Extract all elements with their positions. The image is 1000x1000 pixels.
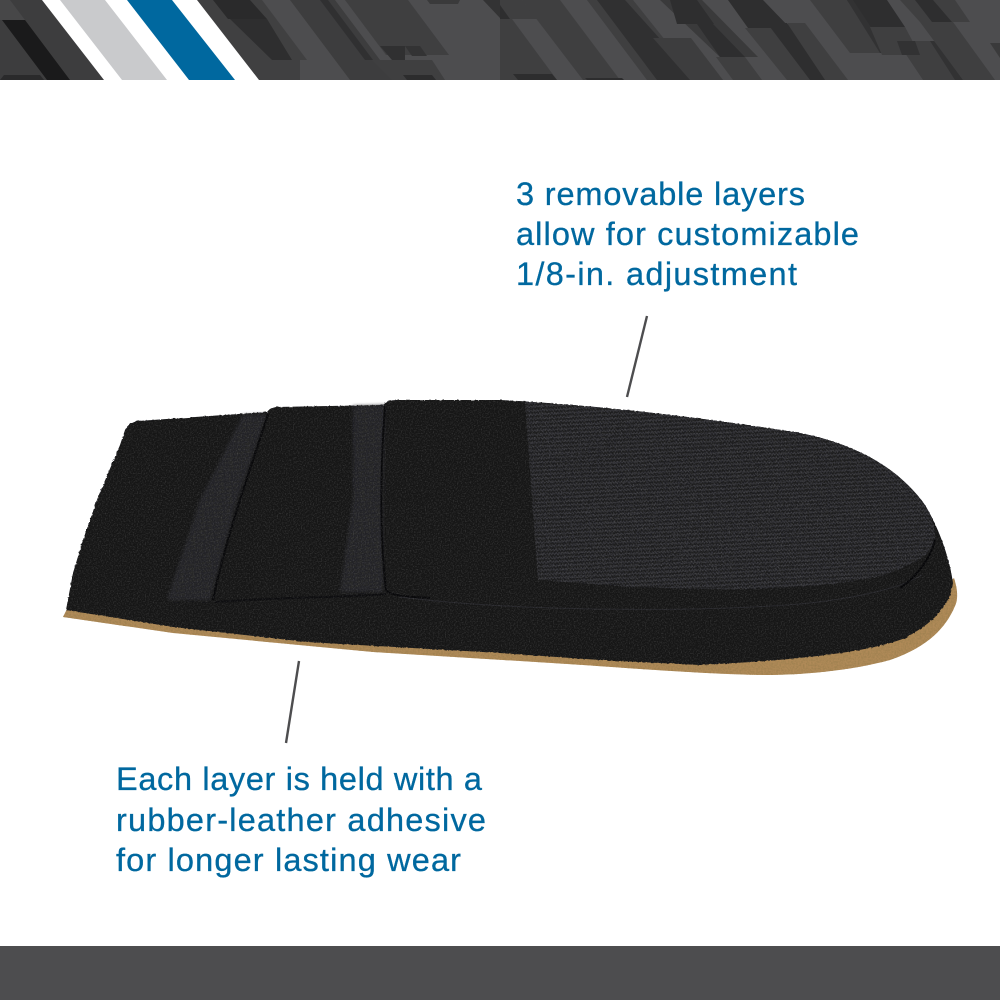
callout: adhesive: for longer lasting wear bbox=[116, 842, 461, 878]
layer edges bbox=[213, 406, 935, 609]
leader line: bottom callout bbox=[286, 661, 299, 743]
textured rubber top surface bbox=[525, 402, 935, 589]
callout: adhesive: Each layer is held with a bbox=[116, 761, 483, 797]
exposed woven strip left bbox=[167, 414, 267, 600]
callout: removable layers: 3 removable layers bbox=[516, 176, 805, 212]
callout: removable layers: allow for customizable bbox=[516, 216, 859, 252]
exposed woven strip right bbox=[340, 405, 385, 592]
callout: adhesive bbox=[116, 761, 486, 878]
callout: removable layers: 1/8-in. adjustment bbox=[516, 256, 797, 292]
header banner bbox=[0, 0, 1000, 80]
leader line: top callout bbox=[627, 316, 647, 397]
black suede body bbox=[66, 400, 953, 665]
callout: adhesive: rubber-leather adhesive bbox=[116, 802, 486, 838]
footer bar bbox=[0, 946, 1000, 1000]
product photo: layered heel lift bbox=[55, 398, 965, 680]
suede grain bbox=[60, 398, 960, 668]
callout: removable layers bbox=[516, 176, 859, 292]
stripes bbox=[42, 0, 259, 80]
tan leather base bbox=[55, 575, 965, 680]
